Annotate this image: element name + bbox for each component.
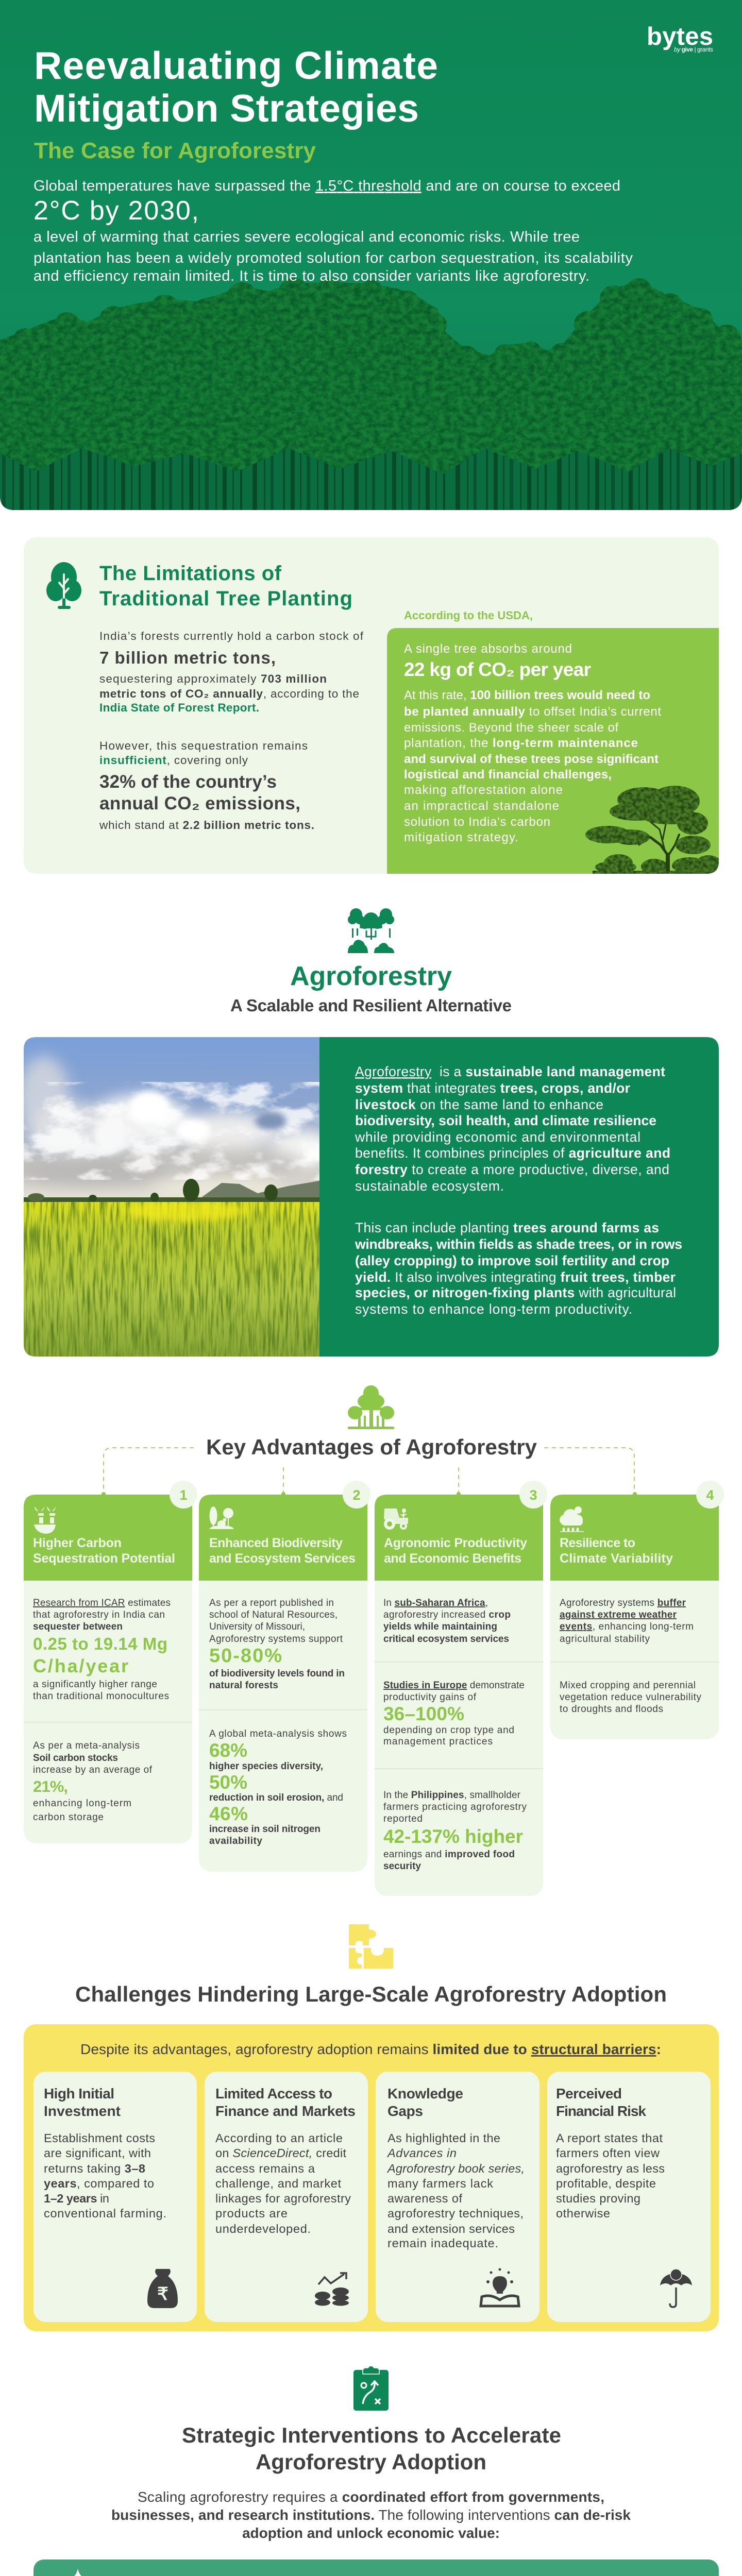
- intro paragraph: businesses, and research institutions. The following interventions can de-risk: [111, 2507, 631, 2523]
- card: perceived financial risk: studies proving: [556, 2192, 640, 2205]
- text: University of Missouri report: University of Missouri,: [209, 1621, 305, 1632]
- card: high initial investment: Establishment costs: [44, 2131, 155, 2145]
- row: financial incentives: [33, 2560, 719, 2576]
- text block: insufficient sequestration: 32% of the country’s: [99, 772, 277, 792]
- callout: USDA tree absorption: and survival of these trees pose significant: [404, 752, 659, 766]
- definition text panel: while providing economic and environmental: [355, 1129, 640, 1145]
- heading: Agronomic Productivity: [384, 1536, 527, 1550]
- card: knowledge gaps: [376, 2072, 539, 2322]
- card: access to finance: on ScienceDirect, credit: [215, 2146, 346, 2160]
- intro line: Despite its advantages, agroforestry adoption remains limited due to structural barriers:: [80, 2041, 661, 2057]
- heading: and Ecosystem Services: [209, 1551, 356, 1566]
- heading: strategic interventions: Strategic Interventions to Accelerate: [182, 2423, 561, 2447]
- callout: USDA tree absorption: be planted annually to offset India’s current: [404, 705, 661, 719]
- icon: rupee umbrella: [660, 2269, 692, 2307]
- heading: challenges: Challenges Hindering Large-Scale Agroforestry Adoption: [75, 1982, 667, 2006]
- text block: insufficient sequestration: insufficient, covering only: [99, 754, 248, 767]
- text: sub-Saharan Africa: critical ecosystem services: [383, 1634, 509, 1645]
- definition text panel: (alley cropping) to improve soil fertility and crop: [355, 1253, 669, 1268]
- text: Philippines: 42-137% higher: [383, 1826, 523, 1847]
- callout: USDA tree absorption: solution to India's carbon: [404, 815, 550, 829]
- text: University of Missouri report: As per a report published in: [209, 1598, 334, 1608]
- icon: agroforestry trees and cactus: [348, 908, 394, 953]
- intro text block: Global temperatures have surpassed the 1.5°C threshold and are on course to exceed: [33, 178, 620, 194]
- definition text panel: system that integrates trees, crops, and/or: [355, 1080, 630, 1096]
- text: ICAR estimates: [33, 1598, 171, 1702]
- text: buffer against extreme weather: Agroforestry systems buffer: [560, 1598, 686, 1608]
- card: access to finance: challenge, and market: [215, 2177, 341, 2190]
- definition text panel: yield. It also involves integrating fruit trees, timber: [355, 1269, 676, 1285]
- card: perceived financial risk: [547, 2072, 711, 2322]
- heading: strategic interventions: Agroforestry Adoption: [256, 2450, 486, 2474]
- heading: key advantages: Key Advantages of Agroforestry: [206, 1435, 537, 1459]
- card: access to finance: Finance and Markets: [215, 2103, 356, 2119]
- intro text block: [33, 178, 633, 284]
- card: access to finance: Limited Access to: [215, 2086, 332, 2102]
- heading: strategic interventions: [182, 2423, 561, 2474]
- text: studies in Europe: productivity gains of: [383, 1692, 477, 1703]
- icon: tractor: [384, 1509, 408, 1530]
- image: tree with shrubs: [585, 786, 722, 874]
- icon: rupee money bag: ₹: [157, 2284, 168, 2304]
- panel: agroforestry definition: [15, 1037, 719, 1357]
- definition text panel: biodiversity, soil health, and climate resilience: [355, 1113, 656, 1128]
- card: knowledge gaps: many farmers lack: [387, 2177, 493, 2190]
- heading: The Limitations of: [99, 562, 282, 585]
- text: soil carbon stocks: Soil carbon stocks: [33, 1753, 118, 1764]
- icon: carbon sprouts: [34, 1507, 56, 1534]
- text: soil carbon stocks: [33, 1740, 153, 1823]
- text: sub-Saharan Africa: yields while maintaining: [383, 1621, 497, 1632]
- text: soil carbon stocks: enhancing long-term: [33, 1798, 131, 1809]
- text: ICAR estimates: Research from ICAR estimates: [33, 1598, 171, 1608]
- logo: bytes by give grants: bytes: [647, 23, 713, 50]
- text block: insufficient sequestration: [99, 739, 314, 832]
- text: Philippines: [383, 1790, 527, 1872]
- text: buffer against extreme weather: events, enhancing long-term: [560, 1621, 694, 1632]
- title: Mitigation Strategies: [34, 87, 419, 130]
- text: studies in Europe: Studies in Europe demonstrate: [383, 1680, 525, 1691]
- text: global meta-analysis: 68%: [209, 1740, 247, 1761]
- text: ICAR estimates: 0.25 to 19.14 Mg: [33, 1634, 167, 1653]
- card: perceived financial risk: A report states that: [556, 2131, 663, 2145]
- text: ICAR estimates: C/ha/year: [33, 1655, 128, 1676]
- text: University of Missouri report: of biodiversity levels found in: [209, 1668, 345, 1679]
- text: University of Missouri report: 50-80%: [209, 1645, 282, 1667]
- definition text panel: [319, 1037, 719, 1357]
- yellow panel: structural barriers: [24, 2024, 719, 2331]
- text: studies in Europe: depending on crop type and: [383, 1725, 514, 1736]
- icon: trees and rabbit: [209, 1506, 234, 1529]
- heading: Climate Variability: [560, 1551, 673, 1566]
- key advantages section: [24, 1385, 724, 1896]
- forest silhouette image: [0, 278, 742, 510]
- icon: tree: [46, 562, 81, 609]
- heading: [384, 1536, 527, 1566]
- text: global meta-analysis: increase in soil nitrogen: [209, 1824, 321, 1835]
- text: soil carbon stocks: 21%,: [33, 1777, 68, 1795]
- text: sub-Saharan Africa: In sub-Saharan Africa,: [383, 1598, 488, 1608]
- card: perceived financial risk: Perceived: [556, 2086, 622, 2102]
- agroforestry section heading: [230, 908, 512, 1015]
- text block: forest carbon stock: India’s forests currently hold a carbon stock of: [99, 630, 364, 642]
- card: knowledge gaps: Agroforestry book series,: [386, 2162, 525, 2175]
- intro paragraph: adoption and unlock economic value:: [242, 2525, 500, 2541]
- intro text block: and efficiency remain limited. It is time to also consider variants like agroforestry.: [33, 268, 589, 284]
- card: perceived financial risk: otherwise: [556, 2207, 610, 2220]
- card: access to finance: According to an article: [215, 2131, 343, 2145]
- icon: growth chart and coins: [315, 2273, 349, 2306]
- definition text panel: Agroforestry is a sustainable land management: [355, 1064, 665, 1079]
- icon: puzzle pieces: [349, 1924, 393, 1969]
- card: high initial investment: Investment: [44, 2103, 121, 2119]
- text: mixed cropping: [560, 1680, 702, 1715]
- text: mixed cropping: Mixed cropping and perennial: [560, 1680, 696, 1691]
- card: access to finance: access remains a: [215, 2162, 315, 2175]
- text: global meta-analysis: 46%: [209, 1803, 248, 1824]
- heading: [209, 1536, 356, 1566]
- text: soil carbon stocks: carbon storage: [33, 1812, 104, 1823]
- intro paragraph: [111, 2489, 631, 2541]
- text block: forest carbon stock: [99, 630, 364, 714]
- text: ICAR estimates: that agroforestry in India can: [33, 1609, 165, 1620]
- card: knowledge gaps: awareness of: [387, 2192, 462, 2205]
- definition text panel: systems to enhance long-term productivity.: [355, 1301, 632, 1317]
- card: high initial investment: [33, 2072, 197, 2322]
- card: knowledge gaps: As highlighted in the: [387, 2131, 500, 2145]
- text: ICAR estimates: sequester between: [33, 1621, 123, 1632]
- card: perceived financial risk: profitable, despite: [556, 2177, 656, 2190]
- callout: USDA tree absorption: mitigation strategy.: [404, 831, 518, 844]
- label: according to the USDA: According to the USDA,: [404, 609, 533, 622]
- icon: rupee coin with sparkles: [48, 2569, 82, 2576]
- intro paragraph: Scaling agroforestry requires a coordinated effort from governments,: [138, 2489, 604, 2505]
- heading: [560, 1536, 673, 1566]
- definition text panel: forestry to create a more productive, diverse, and: [355, 1162, 669, 1177]
- heading: Enhanced Biodiversity: [209, 1536, 343, 1550]
- intro text block: a level of warming that carries severe ecological and economic risks. While tree: [33, 229, 580, 245]
- text block: forest carbon stock: India State of Forest Report.: [99, 701, 259, 714]
- text: ICAR estimates: than traditional monocultures: [33, 1691, 169, 1702]
- text block: insufficient sequestration: However, this sequestration remains: [99, 739, 308, 752]
- card: perceived financial risk: Financial Risk: [556, 2103, 646, 2119]
- text: University of Missouri report: school of Natural Resources,: [209, 1609, 338, 1620]
- card: knowledge gaps: Gaps: [387, 2103, 423, 2119]
- text: studies in Europe: 36–100%: [383, 1703, 464, 1724]
- card 1: carbon sequestration: [24, 1481, 197, 1843]
- card: knowledge gaps: agroforestry techniques,: [387, 2207, 524, 2220]
- panel: limitations of traditional tree planting: [24, 537, 722, 874]
- image: rice field under cloudy sky: [15, 1037, 335, 1357]
- heading: [33, 1536, 175, 1566]
- callout: USDA tree absorption: making afforestation alone: [404, 783, 563, 797]
- icon: rupee money bag: [147, 2269, 178, 2308]
- icon: lightbulb over book: [481, 2268, 519, 2306]
- card 2: biodiversity: 2: [352, 1487, 361, 1503]
- card: high initial investment: conventional farming.: [44, 2207, 166, 2220]
- text: Philippines: In the Philippines, smallholder: [383, 1790, 521, 1801]
- icon: clipboard strategy: [353, 2366, 389, 2411]
- text: global meta-analysis: reduction in soil erosion, and: [209, 1792, 343, 1803]
- card: perceived financial risk: agroforestry as less: [556, 2162, 665, 2175]
- card: knowledge gaps: Advances in: [386, 2146, 457, 2160]
- text block: forest carbon stock: metric tons of CO₂ annually, according to the: [99, 687, 359, 700]
- card: high initial investment: years, compared to: [44, 2177, 154, 2190]
- text: studies in Europe: [383, 1680, 525, 1747]
- card: access to finance: underdeveloped.: [215, 2222, 311, 2235]
- icon: cloud and sun: [560, 1506, 584, 1532]
- card: high initial investment: returns taking 3–8: [44, 2162, 145, 2175]
- connector lines: [104, 1448, 634, 1492]
- text block: forest carbon stock: sequestering approximately 703 million: [99, 672, 327, 685]
- heading: and Economic Benefits: [384, 1551, 521, 1566]
- callout: USDA tree absorption: [387, 628, 722, 874]
- text: global meta-analysis: higher species diversity,: [209, 1761, 323, 1772]
- text: global meta-analysis: [209, 1728, 347, 1846]
- card: access to finance: products are: [215, 2207, 288, 2220]
- definition text panel: benefits. It combines principles of agriculture and: [355, 1145, 670, 1161]
- text: University of Missouri report: natural forests: [209, 1680, 278, 1691]
- subtitle: The Case for Agroforestry: [34, 138, 316, 163]
- logo: bytes by give grants: by give | grants: [674, 46, 713, 53]
- heading: Higher Carbon: [33, 1536, 122, 1550]
- text: soil carbon stocks: As per a meta-analysis: [33, 1740, 140, 1751]
- definition text panel: species, or nitrogen-fixing plants with agricultural: [355, 1285, 676, 1300]
- text: mixed cropping: vegetation reduce vulnerability: [560, 1692, 702, 1703]
- text: University of Missouri report: Agroforestry systems support: [209, 1634, 343, 1645]
- text: studies in Europe: management practices: [383, 1736, 493, 1747]
- text: buffer against extreme weather: agricultural stability: [560, 1634, 650, 1645]
- heading: Agroforestry: Agroforestry: [290, 961, 452, 991]
- callout: USDA tree absorption: an impractical standalone: [404, 799, 559, 813]
- callout: USDA tree absorption: logistical and financial challenges,: [404, 768, 612, 782]
- text: global meta-analysis: A global meta-analysis shows: [209, 1728, 347, 1739]
- text: sub-Saharan Africa: [383, 1598, 511, 1645]
- text: sub-Saharan Africa: agroforestry increased crop: [383, 1609, 511, 1620]
- text: Philippines: reported: [383, 1814, 423, 1824]
- heading: Sequestration Potential: [33, 1551, 175, 1566]
- card: high initial investment: 1–2 years in: [44, 2192, 109, 2205]
- card: high initial investment: are significant, with: [44, 2146, 151, 2160]
- callout: USDA tree absorption: 22 kg of CO₂ per year: [404, 659, 591, 680]
- heading: Resilience to: [560, 1536, 635, 1550]
- definition text panel: windbreaks, within fields as shade trees, or in rows: [355, 1236, 682, 1252]
- text block: forest carbon stock: 7 billion metric tons,: [99, 648, 276, 667]
- card 3: agronomic productivity: [375, 1481, 547, 1896]
- text block: insufficient sequestration: annual CO₂ emissions,: [99, 793, 300, 814]
- card: perceived financial risk: farmers often view: [556, 2146, 660, 2160]
- definition text panel: This can include planting trees around farms as: [355, 1220, 659, 1235]
- text: ICAR estimates: a significantly higher range: [33, 1679, 157, 1690]
- card: access to finance: linkages for agroforestry: [215, 2192, 351, 2205]
- card 2: biodiversity: [199, 1481, 370, 1872]
- text block: insufficient sequestration: which stand at 2.2 billion metric tons.: [99, 819, 314, 832]
- heading: Traditional Tree Planting: [99, 587, 352, 610]
- text: Philippines: earnings and improved food: [383, 1849, 515, 1860]
- text: University of Missouri report: [209, 1598, 345, 1691]
- card: knowledge gaps: and extension services: [387, 2222, 515, 2235]
- card: knowledge gaps: remain inadequate.: [387, 2236, 498, 2250]
- text: global meta-analysis: 50%: [209, 1772, 247, 1793]
- title: Reevaluating Climate: [34, 44, 438, 87]
- card: knowledge gaps: Knowledge: [387, 2086, 463, 2102]
- text: Philippines: security: [383, 1861, 421, 1872]
- text: global meta-analysis: availability: [209, 1836, 262, 1846]
- text: buffer against extreme weather: against extreme weather: [560, 1609, 677, 1620]
- intro text block: plantation has been a widely promoted solution for carbon sequestration, its scalability: [33, 250, 633, 266]
- heading: [99, 562, 352, 610]
- callout: USDA tree absorption: plantation, the long-term maintenance: [404, 736, 638, 750]
- subheading: A Scalable and Resilient Alternative: [230, 996, 512, 1015]
- text: Philippines: farmers practicing agroforestry: [383, 1802, 527, 1812]
- card 1: carbon sequestration: 1: [179, 1487, 188, 1503]
- icon: tree with branches: [348, 1385, 394, 1429]
- text: buffer against extreme weather: [560, 1598, 694, 1645]
- text: mixed cropping: to droughts and floods: [560, 1704, 663, 1715]
- card 4: climate resilience: 4: [706, 1487, 714, 1503]
- callout: USDA tree absorption: emissions. Beyond the sheer scale of: [404, 721, 618, 735]
- callout: USDA tree absorption: A single tree absorbs around: [404, 642, 572, 656]
- intro text block: 2°C by 2030,: [33, 196, 199, 226]
- definition text panel: livestock on the same land to enhance: [355, 1097, 603, 1112]
- hero header panel: [0, 0, 742, 510]
- challenges section: [24, 1924, 719, 2331]
- title: [34, 44, 438, 130]
- strategic interventions section: [33, 2366, 719, 2576]
- card: access to finance: [205, 2072, 368, 2322]
- card 3: agronomic productivity: 3: [529, 1487, 537, 1503]
- callout: USDA tree absorption: At this rate, 100 billion trees would need to: [404, 688, 650, 702]
- card 4: climate resilience: [550, 1481, 724, 1739]
- text: soil carbon stocks: increase by an average of: [33, 1765, 153, 1775]
- definition text panel: sustainable ecosystem.: [355, 1178, 504, 1194]
- card: high initial investment: High Initial: [44, 2086, 114, 2102]
